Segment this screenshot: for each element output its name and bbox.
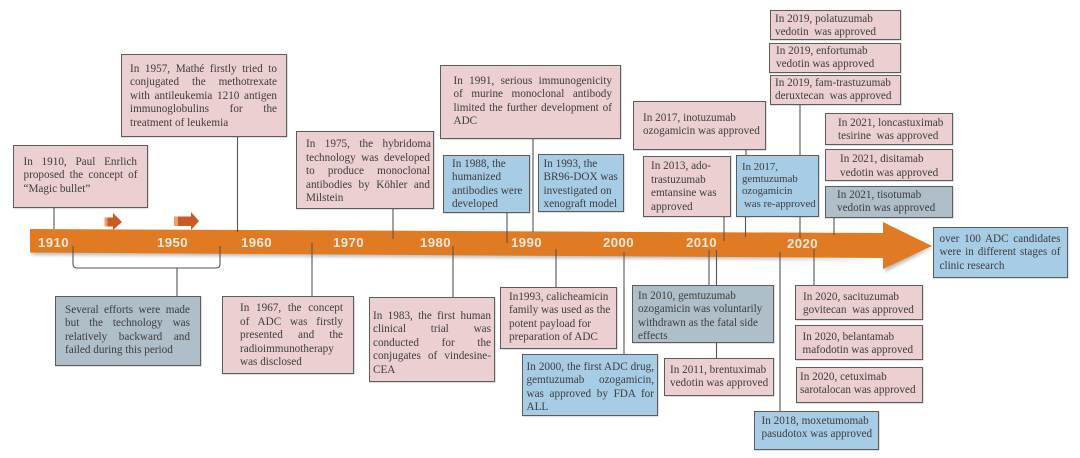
callout: 1993 calicheamicin: In1993, calicheamicin <box>509 290 608 302</box>
callout: 2013 ado-trastuzumab: trastuzumab <box>651 174 706 186</box>
callout: 2000 first ADC drug: gemtuzumab ozogamicin, <box>526 374 654 386</box>
callout: 2020 belantamab: In 2020, belantamab <box>802 330 894 342</box>
callout: 2020 sacituzumab <box>795 285 923 320</box>
callout: 1993 BR96-DOX <box>538 154 624 212</box>
callout: 1975 hybridoma: technology was developed <box>306 152 430 164</box>
year labels: 1990 <box>511 235 542 250</box>
callout: 1983 human clinical trial <box>369 297 495 382</box>
callout: several efforts: but the technology was <box>65 317 190 329</box>
callout: 2020 sacituzumab: In 2020, sacituzumab <box>803 290 899 302</box>
callout: 1991 immunogenicity: ADC <box>454 115 477 127</box>
callout: over 100 ADC candidates: clinic research <box>940 260 1004 272</box>
callout: 2010 withdrawn: In 2010, gemtuzumab <box>638 290 736 302</box>
callout: 2013 ado-trastuzumab: In 2013, ado- <box>651 160 711 172</box>
callout: 1910 Magic bullet: proposed the concept of <box>24 169 138 181</box>
callout: 2021 tisotumab <box>825 186 953 218</box>
callout: 2021 loncastuximab: In 2021, loncastuximab <box>838 116 943 128</box>
callout: 2010 withdrawn <box>632 285 774 343</box>
callout: 2019 fam-trastuzumab: deruxtecan was approved <box>775 90 892 102</box>
callout: 2000 first ADC drug: In 2000, the first ADC drug, <box>526 360 654 372</box>
callout: several efforts: Several efforts were made <box>65 304 190 316</box>
callout: 1967 concept of ADC <box>222 296 354 374</box>
callout: 1988 humanized <box>443 155 530 213</box>
year labels: 2000 <box>603 235 634 250</box>
callout: 2021 disitamab: In 2021, disitamab <box>840 153 924 165</box>
callout: 2020 belantamab <box>795 325 923 360</box>
callout: 1975 hybridoma: In 1975, the hybridoma <box>306 138 431 150</box>
callout: 2021 disitamab: vedotin was approved <box>840 167 938 179</box>
year labels <box>38 235 818 251</box>
callout: 2019 polatuzumab <box>770 10 901 40</box>
callout: 2013 ado-trastuzumab: approved <box>651 201 693 213</box>
callout: 1991 immunogenicity: of murine monoclonal antibody <box>454 88 612 100</box>
year labels: 2020 <box>787 236 818 251</box>
callout: 2019 enfortumab: vedotin was approved <box>776 58 874 70</box>
year labels: 1980 <box>420 235 451 250</box>
callout: 1975 hybridoma: to produce monoclonal <box>306 165 430 177</box>
callout: 2021 loncastuximab: tesirine was approved <box>838 130 938 142</box>
callout: 2010 withdrawn: ozogamicin was voluntarily <box>638 303 762 315</box>
connector lines <box>54 105 834 411</box>
callout: 2021 tisotumab: In 2021, tisotumab <box>837 188 921 200</box>
callout: 2000 first ADC drug: was approved by FDA for <box>526 388 654 400</box>
callout: 1957 Mathé: immunoglobulins for the <box>130 103 277 115</box>
callout: 2018 moxetumomab: pasudotox was approved <box>762 428 872 440</box>
callout: 2019 enfortumab: In 2019, enfortumab <box>776 44 868 56</box>
callout: 1993 BR96-DOX: xenograft model <box>544 198 617 210</box>
callout: 2019 fam-trastuzumab: In 2019, fam-trastuzumab <box>775 76 891 88</box>
arrow: main timeline <box>30 222 934 272</box>
icon: small arrow 1 <box>104 213 122 230</box>
callout: 2019 polatuzumab: In 2019, polatuzumab <box>775 12 873 24</box>
callout: 1993 calicheamicin: family was used as the <box>509 304 610 316</box>
callout: 2017 gemtuzumab re-approved: ozogamicin <box>742 185 792 197</box>
callout: 2018 moxetumomab: In 2018, moxetumomab <box>762 414 869 426</box>
callout: 2017 inotuzumab: ozogamicin was approved <box>643 125 760 137</box>
callout: 1910 Magic bullet: In 1910, Paul Enrlich <box>24 156 137 168</box>
callout: 1967 concept of ADC: presented and the <box>240 329 343 341</box>
callout: over 100 ADC candidates: over 100 ADC candidates <box>940 232 1060 244</box>
callout: 2017 gemtuzumab re-approved: was re-approved <box>744 198 816 210</box>
callout: 1988 humanized: developed <box>452 198 498 210</box>
callout: 2011 brentuximab <box>664 358 774 396</box>
icon: small arrow 2 <box>174 212 199 230</box>
callout: 1975 hybridoma <box>296 131 434 209</box>
callout: 1957 Mathé: In 1957, Mathé firstly tried to <box>130 62 277 74</box>
callout: 1975 hybridoma: antibodies by Köhler and <box>306 179 430 191</box>
callout: 1993 calicheamicin: preparation of ADC <box>509 331 598 343</box>
callout: 1957 Mathé: with antileukemia 1210 antigen <box>130 90 277 102</box>
callout: 1993 calicheamicin <box>500 287 617 349</box>
callout: 2018 moxetumomab <box>754 411 879 450</box>
callout: 2017 gemtuzumab re-approved: gemtuzumab <box>742 173 798 185</box>
callout: 1983 human clinical trial: conducted for the <box>373 337 491 349</box>
year labels: 1950 <box>157 235 188 250</box>
callout: 1967 concept of ADC: was disclosed <box>240 356 302 368</box>
callout: 1993 BR96-DOX: BR96-DOX was <box>544 171 618 183</box>
year labels: 1970 <box>333 235 364 250</box>
callout: 1993 BR96-DOX: investigated on <box>544 185 612 197</box>
callout: 2013 ado-trastuzumab: emtansine was <box>651 187 717 199</box>
year labels: 1960 <box>241 235 272 250</box>
callout: 2021 loncastuximab <box>825 113 953 145</box>
callout: 2019 enfortumab <box>769 43 901 73</box>
callout: 2019 fam-trastuzumab <box>770 75 901 105</box>
callout: 2011 brentuximab: vedotin was approved <box>670 377 768 389</box>
callout: 1993 calicheamicin: potent payload for <box>509 318 591 330</box>
callout: 1993 BR96-DOX: In 1993, the <box>544 158 597 170</box>
callout: 2010 withdrawn: withdrawn as the fatal side <box>638 317 758 329</box>
callout: 2017 gemtuzumab re-approved: In 2017, <box>742 160 778 172</box>
year labels: 2010 <box>686 235 717 250</box>
callout: 1988 humanized: antibodies were <box>452 185 523 197</box>
callout: 2020 sacituzumab: govitecan was approved <box>803 304 914 316</box>
callout: 1967 concept of ADC: radioimmunotherapy <box>240 343 334 355</box>
callout: 2013 ado-trastuzumab <box>643 156 731 217</box>
callout: 2017 inotuzumab <box>633 101 766 150</box>
callout: over 100 ADC candidates <box>933 227 1068 278</box>
callout: 2020 cetuximab <box>796 367 923 403</box>
callout: 2000 first ADC drug: ALL <box>526 401 548 413</box>
callout: 2020 belantamab: mafodotin was approved <box>802 344 913 356</box>
callout: 2020 cetuximab: sarotalocan was approved <box>800 384 916 396</box>
callout: 1975 hybridoma: Milstein <box>306 192 343 204</box>
callout: 2011 brentuximab: In 2011, brentuximab <box>670 364 766 376</box>
callout: 1991 immunogenicity <box>440 65 621 139</box>
callout: several efforts: failed during this period <box>65 344 173 356</box>
callout: 2021 disitamab <box>825 149 953 181</box>
callout: 1983 human clinical trial: clinical trial was <box>373 323 491 335</box>
callout: 2021 tisotumab: vedotin was approved <box>837 202 935 214</box>
callout: 1967 concept of ADC: In 1967, the concept <box>240 302 343 314</box>
callout: 1910 Magic bullet: “Magic bullet” <box>24 183 90 195</box>
callout: 1957 Mathé: treatment of leukemia <box>130 117 228 129</box>
callout: 1967 concept of ADC: of ADC was firstly <box>240 316 343 328</box>
callout: several efforts: relatively backward and <box>65 331 190 343</box>
callout: 2020 cetuximab: In 2020, cetuximab <box>800 370 887 382</box>
callout: 1983 human clinical trial: CEA <box>373 364 395 376</box>
callout: 2017 gemtuzumab re-approved <box>736 155 819 217</box>
callout: 2000 first ADC drug <box>522 354 658 416</box>
callout: 1991 immunogenicity: limited the further development of <box>454 102 612 114</box>
callout: 1983 human clinical trial: conjugates of vindesine- <box>373 350 491 362</box>
year labels: 1910 <box>38 235 69 250</box>
callout: 2019 polatuzumab: vedotin was approved <box>775 26 876 38</box>
callout: 1991 immunogenicity: In 1991, serious immunogenicity <box>454 74 612 86</box>
callout: over 100 ADC candidates: were in different stages of <box>940 246 1060 258</box>
callout: 1910 Magic bullet <box>13 145 148 208</box>
callout: 1988 humanized: In 1988, the <box>452 158 506 170</box>
callout: several efforts <box>55 296 201 366</box>
callout: 1988 humanized: humanized <box>452 171 501 183</box>
callout: 1983 human clinical trial: In 1983, the first human <box>373 310 491 322</box>
callout: 1957 Mathé <box>121 54 287 137</box>
callout: 1957 Mathé: conjugated the methotrexate <box>130 76 277 88</box>
callout: 2010 withdrawn: effects <box>638 330 668 342</box>
callout: 2017 inotuzumab: In 2017, inotuzumab <box>643 112 736 124</box>
